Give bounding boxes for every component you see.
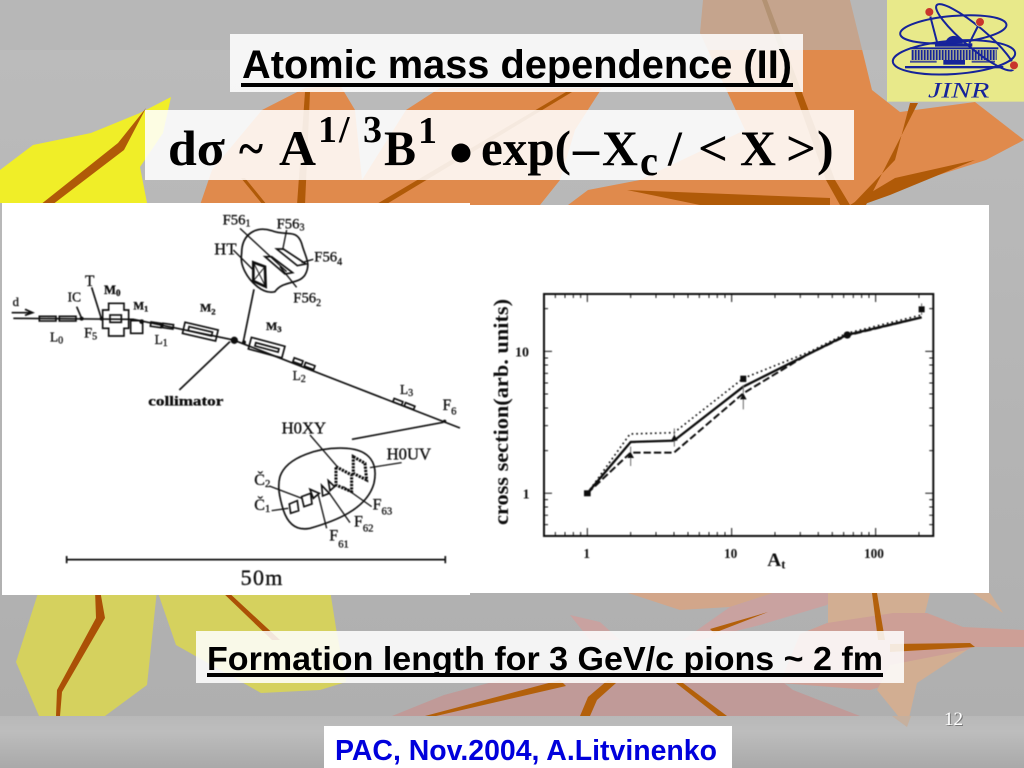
dashed curve — [587, 317, 922, 493]
labels: d — [13, 295, 20, 309]
labels: 0 — [58, 335, 63, 346]
slide number: 12 — [945, 710, 964, 731]
formula: < — [698, 120, 728, 176]
labels: 4 — [337, 257, 342, 268]
formula: X — [740, 120, 776, 176]
formula: ) — [817, 120, 834, 176]
tick labels and axis titles: 10 — [515, 346, 529, 361]
labels: F — [373, 496, 382, 513]
formula: B — [384, 120, 416, 176]
callout: formation length: Formation length for 3 GeV/c pions ~ 2 fm — [207, 640, 883, 677]
labels: M — [200, 301, 211, 315]
tick labels and axis titles — [489, 299, 884, 572]
tick labels and axis titles: cross section(arb. units) — [489, 299, 513, 525]
labels: 2 — [301, 374, 306, 385]
labels: 3 — [408, 388, 413, 399]
labels: 0 — [116, 288, 121, 298]
labels: collimator — [148, 394, 223, 409]
labels: 62 — [363, 524, 374, 535]
tick labels and axis titles: 1 — [523, 488, 530, 503]
data markers — [584, 306, 925, 496]
labels: 50m — [241, 565, 284, 590]
labels: H0XY — [282, 418, 326, 437]
slide number: 12 — [944, 709, 963, 730]
labels: M — [266, 319, 277, 333]
formula: X — [602, 120, 638, 176]
footer: author credit: PAC, Nov.2004, A.Litvinenko — [335, 735, 717, 767]
formula: A — [279, 120, 316, 176]
formula — [145, 109, 854, 185]
labels: 2 — [316, 298, 321, 309]
magnets and lenses — [39, 303, 415, 410]
labels: 3 — [299, 222, 304, 233]
scale bar — [67, 556, 445, 563]
callout: formation length — [196, 631, 904, 683]
labels: L — [50, 329, 58, 344]
tick labels and axis titles: 10 — [724, 546, 738, 561]
labels: M — [133, 300, 144, 312]
labels: HT — [214, 240, 237, 259]
formula: c — [640, 139, 658, 185]
labels: F56 — [277, 216, 299, 232]
labels: Č — [254, 497, 265, 514]
building — [905, 36, 1003, 68]
formula: – — [572, 120, 600, 176]
formula: exp( — [481, 120, 571, 176]
labels: F56 — [223, 213, 245, 229]
labels: 3 — [277, 324, 282, 334]
labels: F — [329, 528, 338, 545]
tick labels and axis titles: A — [767, 550, 781, 571]
labels: IC — [68, 290, 81, 305]
labels: F56 — [314, 250, 337, 266]
error bars — [631, 303, 922, 466]
beamline — [13, 318, 460, 428]
labels: F — [443, 397, 451, 414]
tick labels and axis titles: 1 — [583, 546, 590, 561]
formula: / — [667, 120, 683, 176]
labels: L — [155, 332, 163, 347]
labels: 2 — [265, 479, 270, 490]
panel: cross section chart — [470, 205, 989, 593]
formula: dσ — [168, 120, 225, 176]
labels: L — [293, 368, 301, 383]
labels: 5 — [92, 331, 97, 342]
labels: 1 — [144, 303, 148, 313]
leader lines — [77, 287, 443, 439]
inset: lower detector — [279, 448, 375, 529]
labels: Č — [254, 472, 265, 489]
formula: ~ — [239, 120, 263, 176]
title: Atomic mass dependence (II) — [242, 43, 792, 87]
labels: 1 — [265, 504, 270, 515]
labels: 2 — [211, 306, 216, 316]
labels: 63 — [382, 506, 392, 517]
dotted curve — [587, 315, 922, 493]
inset: upper detector — [241, 229, 308, 292]
labels: F56 — [293, 291, 316, 307]
panel: beamline diagram — [2, 203, 470, 595]
labels: H0UV — [387, 444, 431, 463]
axis ticks — [544, 294, 933, 536]
tick labels and axis titles: t — [781, 558, 786, 572]
labels: 6 — [451, 407, 457, 418]
formula: 1/ 3 — [318, 109, 382, 151]
labels: F — [354, 514, 363, 531]
solid curve — [587, 317, 922, 493]
axes frame — [544, 294, 933, 536]
labels — [13, 213, 457, 590]
labels: 1 — [245, 219, 250, 230]
labels: F — [84, 325, 92, 341]
labels: M — [104, 283, 116, 297]
tick labels and axis titles: 100 — [864, 546, 884, 561]
logo: JINR: JINR — [928, 77, 990, 102]
labels: 61 — [338, 539, 349, 550]
labels: T — [85, 273, 95, 290]
formula: 1 — [418, 110, 437, 152]
labels: 1 — [163, 338, 168, 349]
logo: JINR — [887, 0, 1024, 102]
labels: L — [400, 382, 408, 397]
formula: > — [786, 120, 816, 176]
